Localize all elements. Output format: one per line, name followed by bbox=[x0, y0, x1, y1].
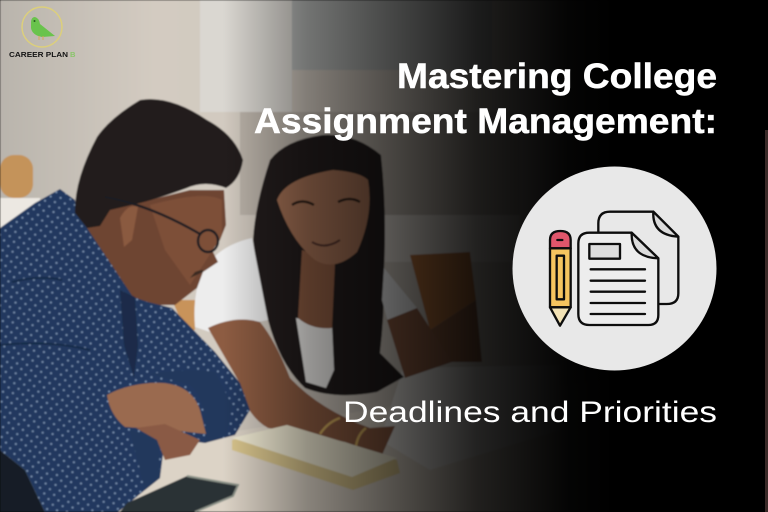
title: Mastering College bbox=[397, 57, 717, 96]
man: forearms bbox=[107, 383, 206, 460]
man: hair bbox=[75, 99, 243, 228]
book bbox=[232, 425, 400, 490]
man: collar, cuff and shirt folds bbox=[0, 278, 232, 490]
phone bbox=[120, 476, 238, 512]
subtitle: Deadlines and Priorities bbox=[343, 396, 717, 429]
logo: Career Plan bird badge: CAREER PLAN bbox=[9, 50, 68, 59]
icon badge: pencil and documents bbox=[512, 166, 716, 370]
man: face and neck bbox=[78, 190, 226, 305]
pencil bbox=[550, 231, 571, 326]
man: glasses bbox=[105, 197, 218, 252]
front document bbox=[578, 233, 658, 325]
woman: arms bbox=[208, 308, 452, 455]
logo: Career Plan bird badge bbox=[9, 7, 76, 59]
dark chair, bottom left bbox=[0, 450, 45, 512]
title: Assignment Management: bbox=[254, 102, 717, 141]
back document bbox=[598, 212, 678, 304]
woman: hair bbox=[253, 135, 404, 395]
title bbox=[254, 57, 717, 141]
man: shirt bbox=[0, 189, 250, 512]
woman: t-shirt bbox=[194, 238, 417, 388]
woman: neck bbox=[298, 250, 335, 328]
woman: face bbox=[277, 170, 370, 264]
right edge strip bbox=[765, 130, 768, 512]
woman: bangles bbox=[320, 418, 366, 446]
logo: Career Plan bird badge: B bbox=[70, 50, 76, 59]
